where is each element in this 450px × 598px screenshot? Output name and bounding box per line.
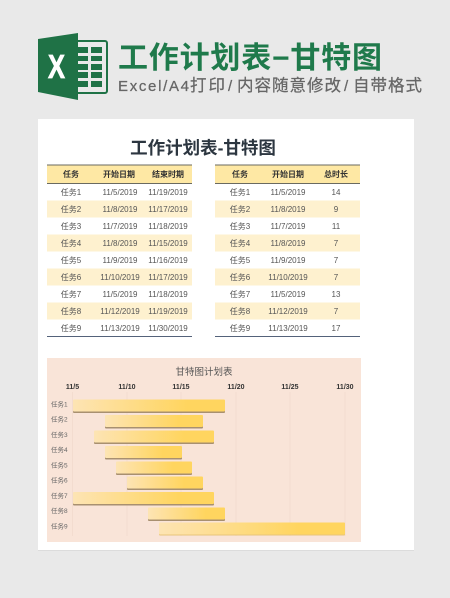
table: dates: 11/18/2019 — [148, 290, 188, 299]
table: durations: 7 — [334, 307, 339, 316]
table: dates — [47, 164, 192, 337]
icon: Excel logo — [38, 33, 107, 100]
table: durations: 任务5 — [230, 255, 251, 265]
table: dates: 开始日期 — [103, 169, 135, 179]
subtitle: Excel/A4 — [118, 78, 189, 95]
table: durations: 任务 — [232, 169, 248, 179]
table: dates: 结束时期 — [152, 169, 184, 179]
title: 工作计划表−甘特图 — [118, 42, 382, 75]
table: dates: 11/19/2019 — [148, 188, 188, 197]
task labels: 任务4 — [51, 445, 68, 454]
axis labels: 11/30 — [336, 384, 354, 391]
table: dates: 任务7 — [61, 289, 82, 299]
table: durations: 11 — [332, 222, 341, 231]
table: dates: 11/18/2019 — [148, 222, 188, 231]
table: durations: 任务3 — [230, 221, 251, 231]
subtitle: 内容随意修改 — [237, 76, 341, 95]
axis labels: 11/5 — [66, 384, 79, 391]
table: durations: 17 — [332, 324, 341, 333]
table: dates: 任务8 — [61, 306, 82, 316]
axis labels: 11/20 — [227, 384, 245, 391]
table: durations: 11/10/2019 — [268, 273, 308, 282]
table: dates: 任务1 — [61, 187, 82, 197]
table: dates: 11/7/2019 — [102, 222, 138, 231]
table: durations: 13 — [332, 290, 341, 299]
task labels — [51, 400, 68, 530]
table: durations: 14 — [332, 188, 341, 197]
subtitle: 自带格式 — [353, 76, 422, 95]
axis labels: 11/10 — [118, 384, 136, 391]
table: durations: 任务4 — [230, 238, 251, 248]
table: durations: 任务6 — [230, 272, 251, 282]
table: durations: 11/5/2019 — [270, 188, 306, 197]
table: dates: 11/5/2019 — [102, 188, 138, 197]
table: dates: 11/13/2019 — [100, 324, 140, 333]
task labels: 任务8 — [51, 506, 68, 515]
table: dates: 11/9/2019 — [102, 256, 138, 265]
task labels: 任务7 — [51, 491, 68, 500]
table: dates: 11/10/2019 — [100, 273, 140, 282]
table: dates: 11/8/2019 — [102, 205, 138, 214]
subtitle: / — [344, 78, 349, 95]
panel: sheet — [38, 119, 414, 551]
axis labels: 11/15 — [172, 384, 190, 391]
table: durations: 7 — [334, 239, 339, 248]
table: dates: 11/19/2019 — [148, 307, 188, 316]
gantt bars — [73, 400, 345, 534]
table: durations: 11/12/2019 — [268, 307, 308, 316]
table: dates: 11/8/2019 — [102, 239, 138, 248]
table: durations: 7 — [334, 256, 339, 265]
table: dates: 任务2 — [61, 204, 82, 214]
table: durations: 11/8/2019 — [270, 239, 306, 248]
task labels: 任务2 — [51, 414, 68, 424]
table: dates: 任务5 — [61, 255, 82, 265]
table: dates: 11/17/2019 — [148, 273, 188, 282]
table: durations: 11/9/2019 — [270, 256, 306, 265]
table: durations: 11/5/2019 — [270, 290, 306, 299]
table: durations: 任务7 — [230, 289, 251, 299]
table: durations: 开始日期 — [272, 169, 304, 179]
table: durations: 11/7/2019 — [270, 222, 306, 231]
subtitle: 打印 — [190, 76, 225, 95]
table: dates: 11/17/2019 — [148, 205, 188, 214]
table: durations: 11/8/2019 — [270, 205, 306, 214]
axis labels — [66, 384, 354, 391]
task labels: 任务9 — [51, 522, 68, 530]
table: durations: 任务9 — [230, 323, 251, 333]
table: dates: 任务6 — [61, 272, 82, 282]
table: durations: 总时长 — [324, 169, 348, 179]
table: durations: 7 — [334, 273, 339, 282]
table: dates: 任务4 — [61, 238, 82, 248]
table: dates: 11/5/2019 — [102, 290, 138, 299]
icon: Excel logo: X — [48, 48, 65, 85]
task labels: 任务5 — [51, 460, 68, 470]
table: dates: 任务3 — [61, 221, 82, 231]
table: durations: 任务1 — [230, 187, 251, 197]
task labels: 任务1 — [51, 400, 68, 408]
chart title: 甘特图计划表 — [175, 366, 233, 378]
table: dates: 任务9 — [61, 323, 82, 333]
subtitle — [118, 76, 422, 95]
table: durations: 11/13/2019 — [268, 324, 308, 333]
table: dates: 11/15/2019 — [148, 239, 188, 248]
table: durations: 任务2 — [230, 204, 251, 214]
task labels: 任务3 — [51, 430, 68, 439]
heading: 工作计划表-甘特图 — [130, 138, 276, 158]
chart: gantt — [47, 358, 361, 542]
table: durations — [215, 164, 360, 337]
table: dates: 任务 — [63, 169, 79, 179]
axis labels: 11/25 — [281, 384, 299, 391]
table: dates: 11/16/2019 — [148, 256, 188, 265]
bar shadows — [73, 401, 345, 536]
subtitle: / — [228, 78, 233, 95]
table: durations: 9 — [334, 205, 339, 214]
table: dates: 11/30/2019 — [148, 324, 188, 333]
table: dates: 11/12/2019 — [100, 307, 140, 316]
task labels: 任务6 — [51, 476, 68, 484]
table: durations: 任务8 — [230, 306, 251, 316]
